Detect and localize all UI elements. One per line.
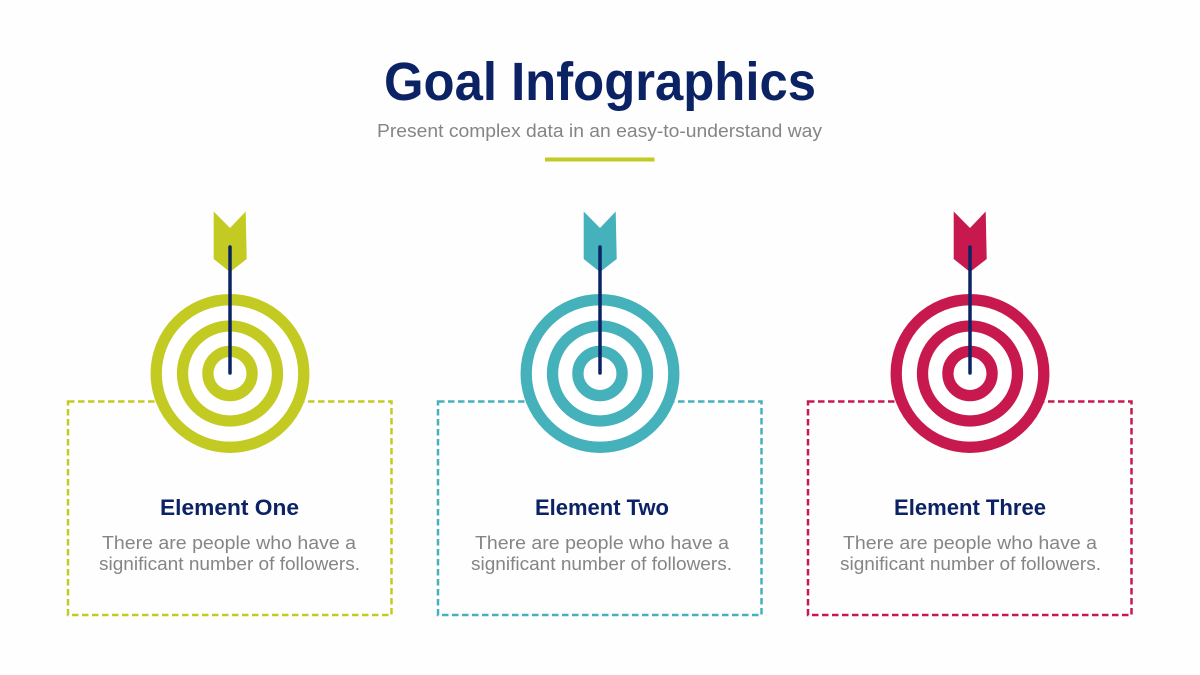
- icon: arrow three: [954, 212, 987, 373]
- panel: element three: [808, 212, 1132, 615]
- panel: element one: [68, 212, 392, 615]
- dashed box: element two: [438, 402, 762, 615]
- heading: element one: Element One: [160, 495, 299, 520]
- icon: target two: [526, 300, 674, 447]
- text: element three description: significant number of followers.: [840, 553, 1101, 574]
- dashed box: element three: [808, 402, 1132, 615]
- text: element two description: There are people who have a: [475, 532, 730, 553]
- text: element two description: [471, 532, 732, 574]
- title: Goal Infographics: [384, 52, 816, 112]
- text: element one description: significant number of followers.: [99, 553, 360, 574]
- icon: target one: [156, 300, 304, 447]
- text: element one description: There are people who have a: [102, 532, 357, 553]
- heading: element three: Element Three: [894, 495, 1046, 520]
- icon: arrow two: [584, 212, 617, 373]
- title underline: [545, 158, 654, 162]
- subtitle: Present complex data in an easy-to-understand way: [377, 120, 823, 141]
- text: element three description: There are people who have a: [843, 532, 1098, 553]
- text: element two description: significant number of followers.: [471, 553, 732, 574]
- dashed box: element one: [68, 402, 392, 615]
- text: element three description: [840, 532, 1101, 574]
- panel: element two: [438, 212, 762, 615]
- text: element one description: [99, 532, 360, 574]
- icon: arrow one: [214, 212, 247, 373]
- icon: target three: [896, 300, 1044, 447]
- heading: element two: Element Two: [535, 495, 669, 520]
